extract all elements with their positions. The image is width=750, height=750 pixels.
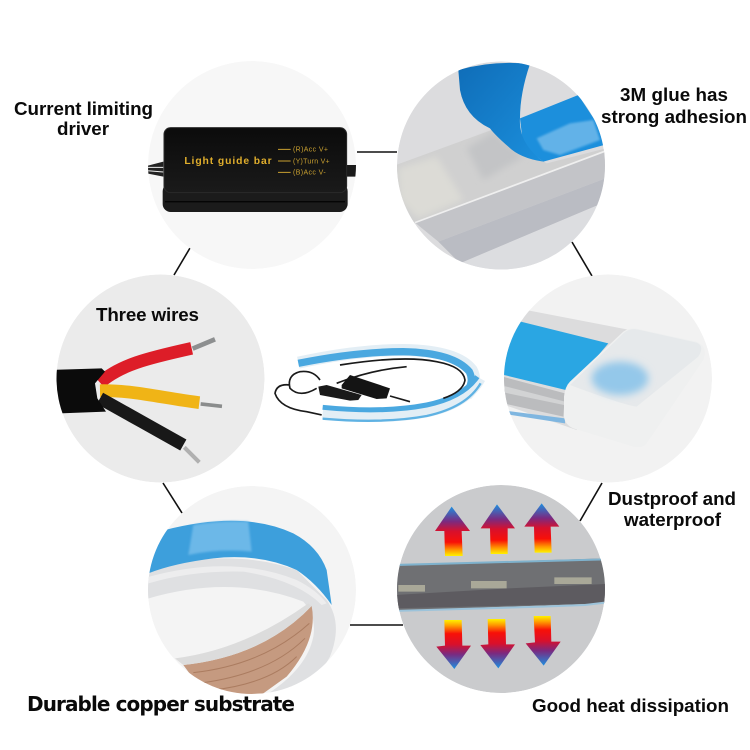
label: three wires: Three wires: [96, 304, 199, 325]
icon: down arrow: [526, 616, 561, 666]
icon: black cable sheath: [56, 368, 106, 414]
label: 3M glue: strong adhesion: [601, 106, 747, 127]
text: wire legend: (Y)Turn V+: [293, 158, 330, 165]
icon: up arrow: [435, 507, 470, 556]
connector lines: [163, 152, 602, 625]
label: dustproof and waterproof: [608, 488, 736, 530]
label: current limiting driver: Current limiting: [14, 98, 153, 119]
icon: yellow wire: [100, 391, 199, 403]
label: 3M glue: 3M glue has: [620, 84, 728, 105]
panel: good heat dissipation: [395, 485, 605, 693]
label: dustproof and waterproof: waterproof: [623, 509, 722, 530]
peeled tape: [458, 63, 543, 162]
text: wire legend: (B)Acc V-: [293, 170, 326, 177]
label: current limiting driver: [14, 98, 153, 139]
label: dustproof and waterproof: Dustproof and: [608, 488, 736, 509]
text: light guide bar: Light guide bar: [184, 156, 272, 167]
label: durable copper substrate: Durable copper substrate: [27, 692, 295, 716]
panel: 3M glue adhesion: [397, 62, 605, 270]
text: wire legend: [278, 147, 330, 177]
label: current limiting driver: driver: [57, 118, 110, 139]
icon: blue tape surface: [148, 521, 332, 605]
icon: white strip band: [143, 558, 336, 697]
icon: up arrow: [524, 503, 559, 553]
icon: driver box: [147, 128, 360, 212]
label: 3M glue: [601, 84, 747, 127]
icon: copper layer: [183, 606, 313, 697]
icon: red wire: [100, 348, 192, 383]
product photo: light strips: [275, 350, 481, 421]
panel: durable copper substrate: [143, 486, 356, 697]
icon: down arrow: [480, 619, 515, 668]
text: wire legend: (R)Acc V+: [293, 147, 328, 154]
panel: current limiting driver: [148, 127, 356, 249]
panel: three wires: [50, 274, 264, 482]
label: good heat dissipation: Good heat dissipation: [532, 695, 729, 716]
strip surfaces: [393, 129, 610, 223]
icon: LED strip: [395, 558, 605, 611]
icon: up arrow: [481, 504, 515, 554]
blue backing tape: [520, 95, 610, 162]
icon: black wire: [100, 398, 183, 445]
icon: down arrow: [436, 620, 471, 669]
panel: dustproof and waterproof: [500, 274, 712, 482]
icon: silicone end cap: [564, 330, 629, 430]
